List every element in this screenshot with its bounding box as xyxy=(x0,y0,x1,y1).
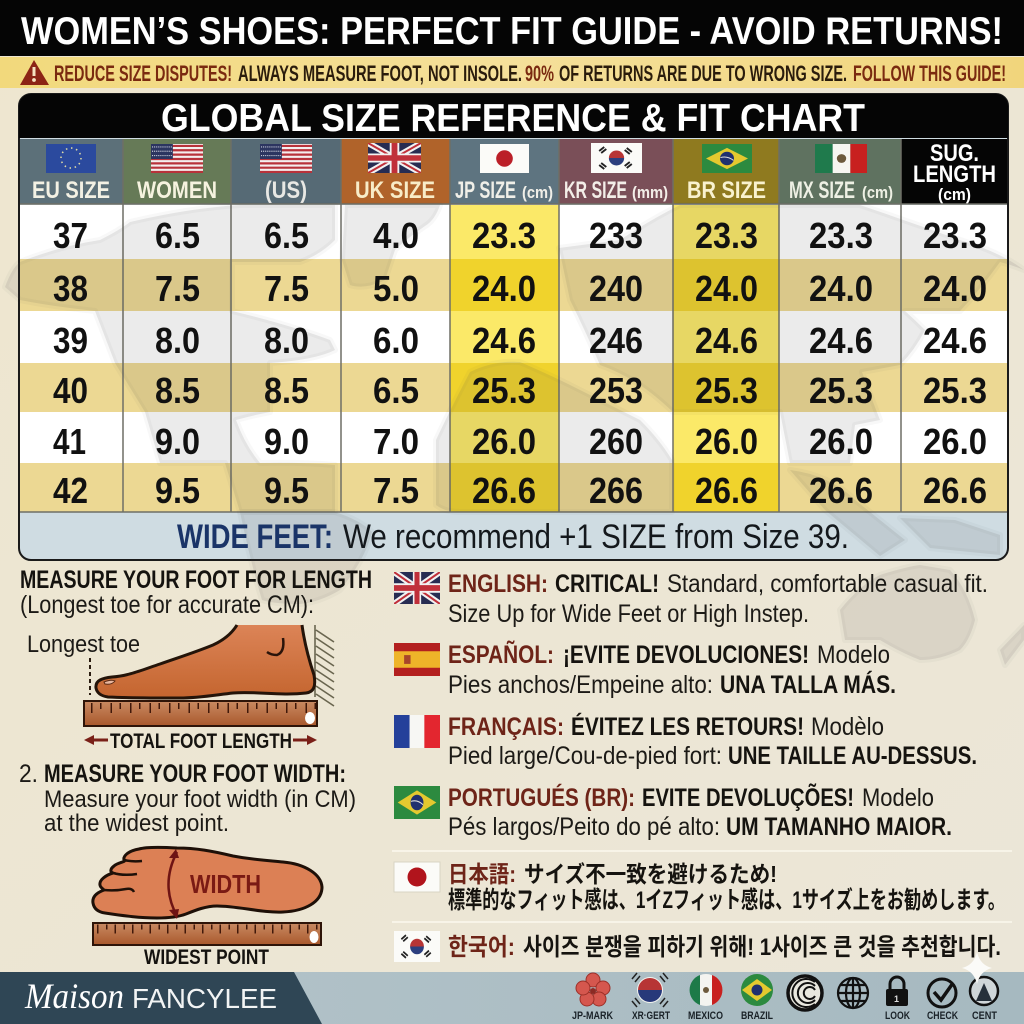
english block xyxy=(394,570,988,628)
header: EU size: EU SIZE xyxy=(32,177,110,204)
japanese block: サイズ不一致を避けるため! xyxy=(524,861,777,887)
french block: FRANÇAIS: xyxy=(448,713,564,741)
header: suggested length: (cm) xyxy=(938,185,971,204)
english block: Standard, comfortable casual fit. xyxy=(667,570,988,598)
icon: cent xyxy=(970,977,998,1022)
header: UK size xyxy=(341,139,450,204)
header: JP size: JP SIZE xyxy=(455,177,516,204)
icon: cent: CENT xyxy=(972,1010,997,1022)
french block xyxy=(394,712,977,770)
icon: Brazil mark: BRAZIL xyxy=(741,1010,773,1022)
row: EU 42 xyxy=(53,470,987,511)
header: MX size xyxy=(779,139,901,204)
row: EU 38: 38 xyxy=(53,268,88,309)
portuguese block: Pés largos/Peito do pé alto: xyxy=(448,813,720,841)
japanese block xyxy=(394,861,1005,914)
row: EU 37: 4.0 xyxy=(373,215,419,256)
icon: Korea mark: XR·GERT xyxy=(632,1010,670,1022)
diagram: top view foot xyxy=(93,847,322,919)
row: EU 40: 25.3 xyxy=(923,370,987,411)
row: EU 41: 7.0 xyxy=(373,421,419,462)
heading: foot length: MEASURE YOUR FOOT FOR LENGTH xyxy=(20,566,372,594)
row: EU 41 xyxy=(53,421,987,462)
header: BR size: BR SIZE xyxy=(687,177,766,204)
row: EU 40: 25.3 xyxy=(695,370,758,411)
portuguese block xyxy=(394,782,952,841)
row: EU 39 xyxy=(53,320,987,361)
header: US size xyxy=(231,139,341,204)
flag: Spain xyxy=(394,643,440,676)
row: EU 37: 37 xyxy=(53,215,88,256)
japanese block: 日本語: xyxy=(448,861,516,887)
row: EU 40: 253 xyxy=(589,370,643,411)
header: JP size: (cm) xyxy=(522,183,553,202)
english block: ENGLISH: xyxy=(448,570,548,598)
icon: Korea mark xyxy=(632,973,670,1022)
warning banner xyxy=(0,57,1024,88)
row: EU 41: 26.0 xyxy=(923,421,987,462)
row: EU 39: 8.0 xyxy=(155,320,200,361)
header: suggested length xyxy=(901,139,1007,204)
spanish block xyxy=(394,639,896,699)
flag: France xyxy=(394,715,440,748)
diagram: side view foot xyxy=(90,625,334,706)
row: EU 39: 246 xyxy=(589,320,643,361)
column grid xyxy=(20,139,1007,512)
chart title: GLOBAL SIZE REFERENCE & FIT CHART xyxy=(161,97,865,140)
row: EU 39: 6.0 xyxy=(373,320,419,361)
header: KR size: KR SIZE xyxy=(564,177,627,204)
flag: UK xyxy=(394,572,440,604)
icon: check xyxy=(927,979,958,1022)
row: EU 37: 233 xyxy=(589,215,643,256)
french block: Pied large/Cou-de-pied fort: xyxy=(448,742,722,770)
row: EU 39: 8.0 xyxy=(264,320,309,361)
heading: foot width: 2. xyxy=(19,760,38,788)
portuguese block: EVITE DEVOLUÇÕES! xyxy=(642,782,854,812)
brand logo: Maison xyxy=(24,976,124,1016)
brand logo xyxy=(0,972,322,1024)
diagram: top view foot: WIDTH xyxy=(190,869,261,899)
spanish block: Pies anchos/Empeine alto: xyxy=(448,671,713,699)
label: longest toe: Longest toe xyxy=(27,631,140,658)
sparkle mark xyxy=(962,952,992,984)
row: EU 41: 9.0 xyxy=(155,421,200,462)
row: EU 41: 9.0 xyxy=(264,421,309,462)
brand logo: FANCYLEE xyxy=(132,983,277,1014)
row: EU 39: 24.6 xyxy=(695,320,758,361)
text: width instruction: at the widest point. xyxy=(44,810,229,837)
warning banner: 90% xyxy=(525,61,554,86)
row: EU 37 xyxy=(53,215,987,256)
icon: lock: LOOK xyxy=(885,1010,910,1022)
header: KR size xyxy=(559,139,673,204)
row: EU 38: 240 xyxy=(589,268,643,309)
portuguese block: UM TAMANHO MAIOR. xyxy=(726,813,952,841)
row: EU 41: 26.0 xyxy=(809,421,873,462)
flag: Korea xyxy=(394,931,440,962)
flag: Brazil xyxy=(394,786,440,819)
warning banner: REDUCE SIZE DISPUTES! xyxy=(54,61,232,86)
header: suggested length: LENGTH xyxy=(913,161,996,188)
row: EU 40: 40 xyxy=(53,370,88,411)
icon: Mexico mark: MEXICO xyxy=(688,1010,723,1022)
header: EU size xyxy=(20,139,123,204)
icon: Mexico mark xyxy=(688,974,723,1022)
wide feet note: We recommend +1 SIZE from Size 39. xyxy=(343,518,849,556)
header: MX size: (cm) xyxy=(862,183,893,202)
ruler: foot length xyxy=(84,701,317,726)
footer bar xyxy=(0,972,1024,1024)
wide feet note xyxy=(177,518,849,556)
row: EU 40: 6.5 xyxy=(373,370,419,411)
header: MX size: MX SIZE xyxy=(789,177,855,204)
french block: Modèlo xyxy=(811,713,884,741)
row: EU 39: 39 xyxy=(53,320,88,361)
header: women US size xyxy=(123,139,231,204)
row: EU 41: 41 xyxy=(53,421,86,462)
panel: global size chart xyxy=(19,94,1008,560)
text: longest toe instruction: (Longest toe for accurate CM): xyxy=(20,591,314,619)
row: EU 38: 7.5 xyxy=(155,268,200,309)
icon: lock xyxy=(885,977,910,1022)
text: width instruction: Measure your foot width (in CM) xyxy=(44,786,356,813)
korean block: 한국어: xyxy=(448,934,515,961)
panel: translations xyxy=(392,570,1012,962)
icon: globe xyxy=(838,978,868,1008)
row: EU 42: 26.6 xyxy=(809,470,873,511)
header: BR size xyxy=(673,139,779,204)
row: EU 39: 24.6 xyxy=(472,320,536,361)
table body bands xyxy=(20,205,1007,512)
row: EU 37: 6.5 xyxy=(155,215,200,256)
header: UK size: UK SIZE xyxy=(355,177,435,204)
row: EU 38: 24.0 xyxy=(472,268,536,309)
icon: Brazil mark xyxy=(741,974,773,1022)
english block: CRITICAL! xyxy=(555,570,659,598)
flag: Japan xyxy=(394,862,440,892)
row: EU 37: 23.3 xyxy=(695,215,758,256)
row: EU 40: 8.5 xyxy=(155,370,200,411)
warning banner: ALWAYS MEASURE FOOT, NOT INSOLE. xyxy=(238,61,522,86)
header: US size: (US) xyxy=(265,177,307,204)
heading: foot width: MEASURE YOUR FOOT WIDTH: xyxy=(44,760,346,788)
row: EU 41: 26.0 xyxy=(472,421,536,462)
row: EU 37: 23.3 xyxy=(923,215,987,256)
spanish block: UNA TALLA MÁS. xyxy=(720,670,896,699)
row: EU 40: 25.3 xyxy=(809,370,873,411)
row: EU 37: 23.3 xyxy=(809,215,873,256)
spanish block: Modelo xyxy=(817,641,890,669)
header: JP size xyxy=(450,139,559,204)
table header xyxy=(20,139,1007,204)
warning banner: OF RETURNS ARE DUE TO WRONG SIZE. xyxy=(559,61,847,86)
icon: sakura JP mark: JP-MARK xyxy=(572,1010,613,1022)
french block: ÉVITEZ LES RETOURS! xyxy=(571,712,804,741)
row: EU 38: 24.0 xyxy=(695,268,758,309)
table values xyxy=(53,215,987,511)
english block: Size Up for Wide Feet or High Instep. xyxy=(448,600,809,628)
label: widest point: WIDEST POINT xyxy=(144,946,269,969)
row: EU 39: 24.6 xyxy=(809,320,873,361)
wide feet note: WIDE FEET: xyxy=(177,518,333,556)
row: EU 38: 5.0 xyxy=(373,268,419,309)
panel: measure foot length xyxy=(20,566,372,753)
spanish block: ¡EVITE DEVOLUCIONES! xyxy=(563,641,809,669)
icon: check: CHECK xyxy=(927,1010,958,1022)
korean block xyxy=(394,931,1001,962)
row: EU 37: 23.3 xyxy=(472,215,536,256)
row: EU 38: 7.5 xyxy=(264,268,309,309)
header: KR size: (mm) xyxy=(632,183,668,202)
icon: spiral seal xyxy=(788,976,822,1010)
row: EU 40: 8.5 xyxy=(264,370,309,411)
row: EU 42: 26.6 xyxy=(923,470,987,511)
icon: warning triangle xyxy=(20,60,49,85)
ruler: foot width xyxy=(93,923,321,945)
row: EU 37: 6.5 xyxy=(264,215,309,256)
row: EU 42: 42 xyxy=(53,470,88,511)
panel: measure foot width xyxy=(19,760,356,969)
icon: lock: 1 xyxy=(894,994,899,1004)
world map watermark xyxy=(5,205,1024,665)
row: EU 38: 24.0 xyxy=(809,268,873,309)
row: EU 38 xyxy=(53,268,987,309)
header: women US size: WOMEN xyxy=(137,177,217,204)
portuguese block: PORTUGUÉS (BR): xyxy=(448,783,635,812)
row: EU 42: 266 xyxy=(589,470,643,511)
portuguese block: Modelo xyxy=(862,784,934,812)
row: EU 42: 9.5 xyxy=(155,470,200,511)
row: EU 42: 7.5 xyxy=(373,470,419,511)
row: EU 40: 25.3 xyxy=(472,370,536,411)
text: width instruction xyxy=(44,786,356,837)
arrow: total foot length: TOTAL FOOT LENGTH xyxy=(110,730,292,753)
row: EU 42: 26.6 xyxy=(472,470,536,511)
row: EU 41: 26.0 xyxy=(695,421,758,462)
row: EU 41: 260 xyxy=(589,421,643,462)
row: EU 39: 24.6 xyxy=(923,320,987,361)
row: EU 40 xyxy=(53,370,987,411)
header: suggested length: SUG. xyxy=(930,140,979,167)
spanish block: ESPAÑOL: xyxy=(448,639,554,669)
row: EU 42: 26.6 xyxy=(695,470,758,511)
icon: sakura JP mark xyxy=(572,973,613,1022)
row: EU 42: 9.5 xyxy=(264,470,309,511)
row: EU 38: 24.0 xyxy=(923,268,987,309)
